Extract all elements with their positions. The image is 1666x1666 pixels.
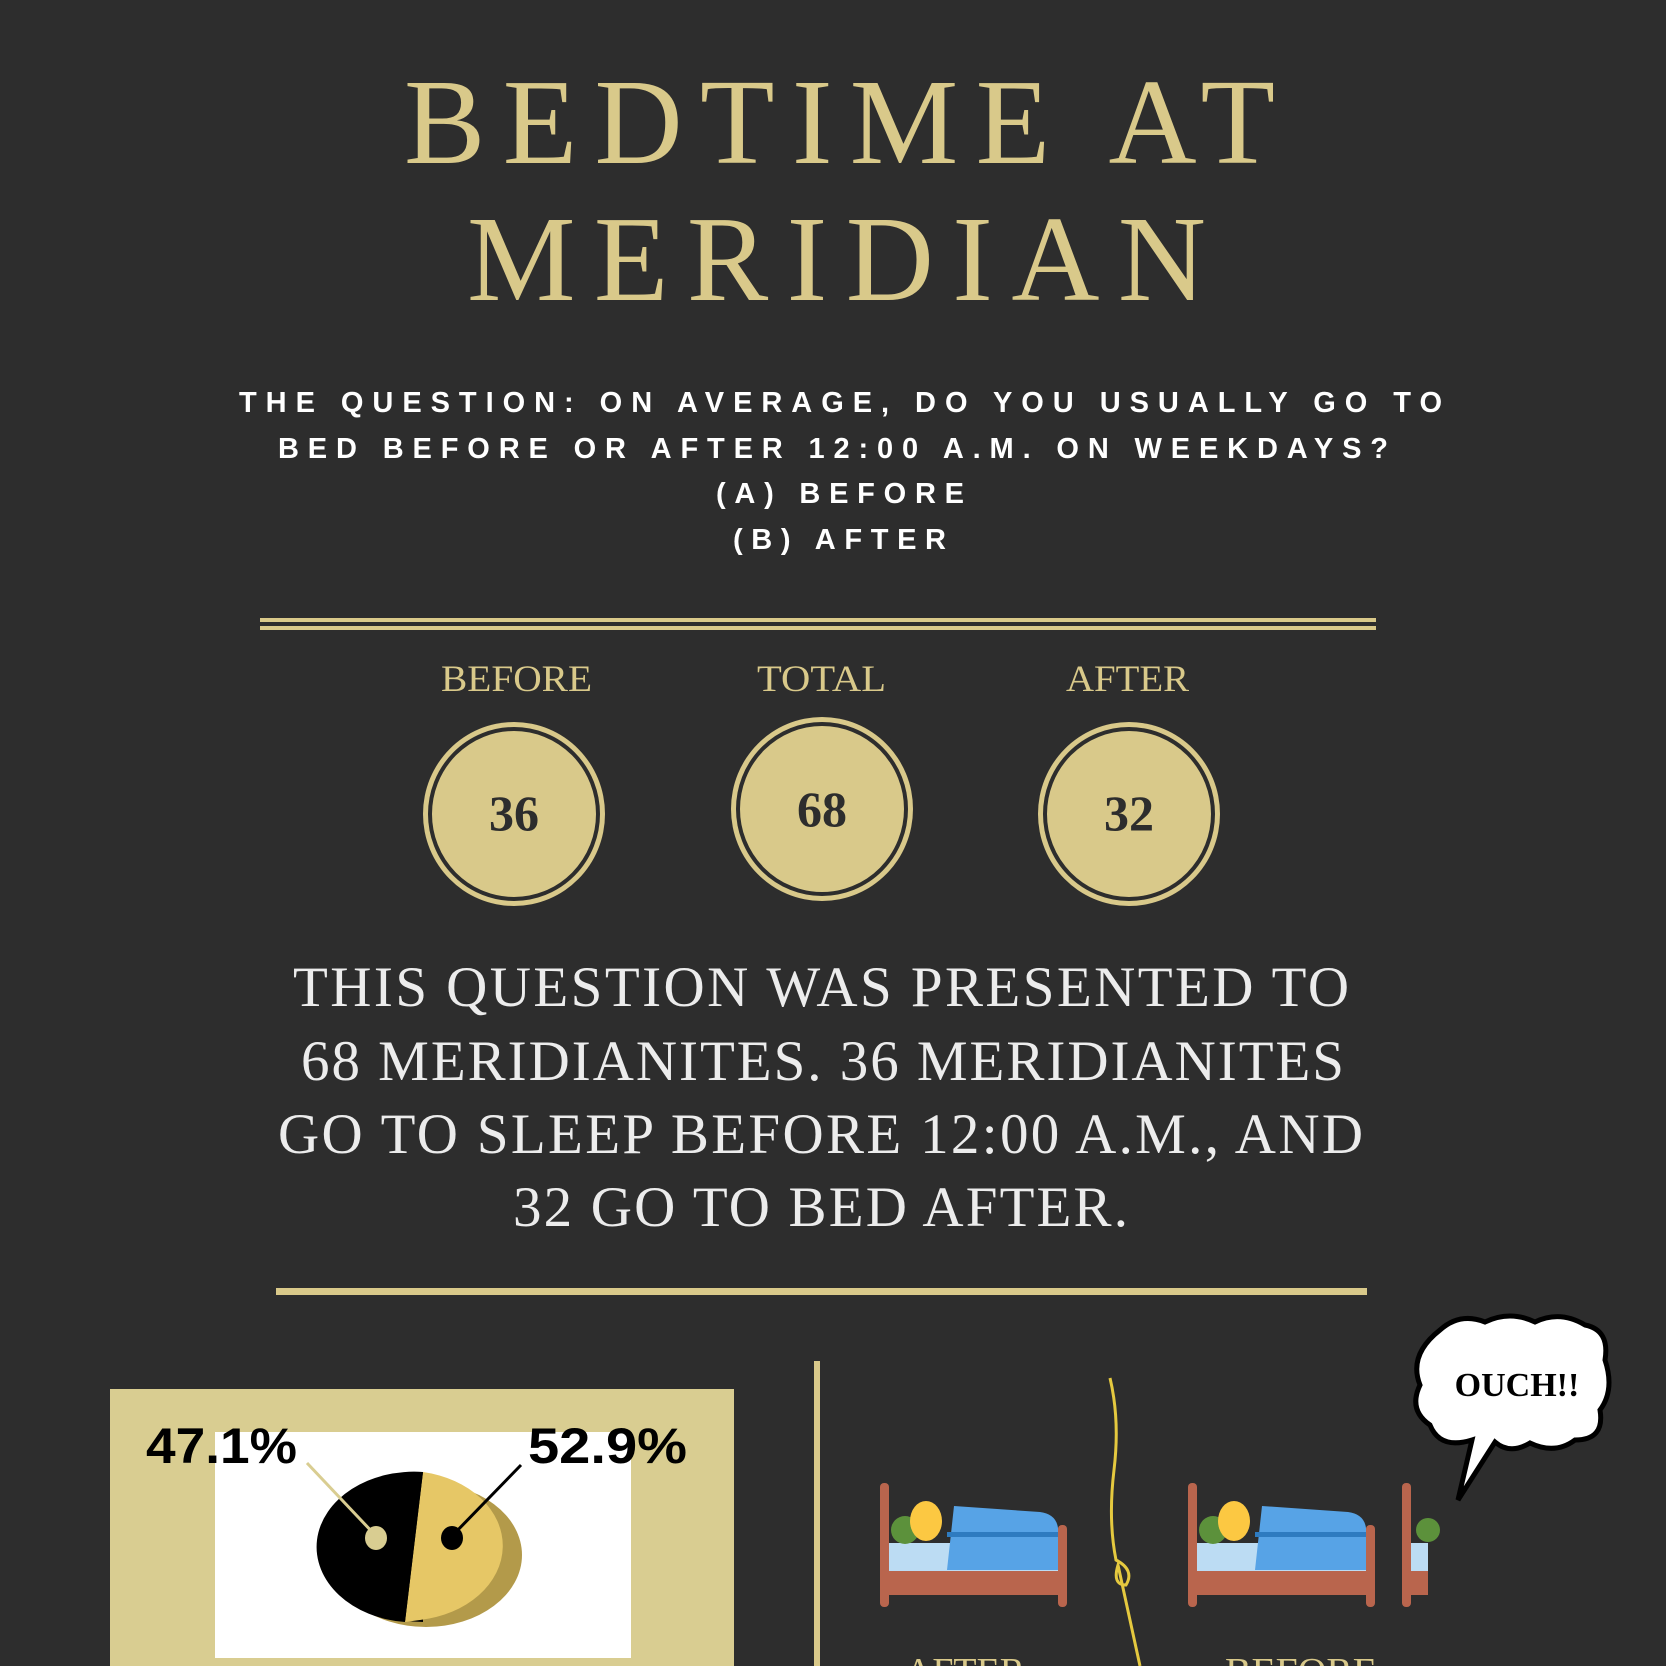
pie — [317, 1472, 522, 1627]
circle: total 68: 68 — [797, 781, 847, 837]
summary paragraph: THIS QUESTION WAS PRESENTED TO — [293, 956, 1349, 1019]
pie labels: 47.1% — [146, 1418, 297, 1474]
circle: after 32 — [1038, 722, 1220, 906]
bed labels — [905, 1651, 1377, 1666]
panel: pie chart — [110, 1389, 734, 1666]
summary paragraph — [278, 956, 1363, 1239]
question text — [239, 387, 1442, 556]
summary paragraph: 32 GO TO BED AFTER. — [513, 1176, 1128, 1239]
question text: (A) BEFORE — [716, 478, 964, 510]
question text: THE QUESTION: ON AVERAGE, DO YOU USUALLY GO TO — [239, 387, 1442, 419]
stat labels — [441, 659, 1189, 700]
panel: pie chart: 52.9% — [528, 1418, 687, 1474]
icon: rope — [1110, 1378, 1140, 1666]
question text: (B) AFTER — [733, 524, 946, 556]
circle: total 68 — [731, 717, 913, 901]
summary paragraph: GO TO SLEEP BEFORE 12:00 A.M., AND — [278, 1103, 1363, 1166]
stat labels: TOTAL — [757, 659, 886, 700]
circle: after 32: 32 — [1104, 785, 1154, 841]
speech bubble — [1416, 1316, 1609, 1500]
icon: partial bed — [1402, 1483, 1440, 1607]
title — [404, 55, 1275, 327]
title: BEDTIME AT — [404, 55, 1275, 190]
speech bubble: OUCH!! — [1455, 1367, 1579, 1404]
question text: BED BEFORE OR AFTER 12:00 A.M. ON WEEKDAYS? — [278, 433, 1388, 465]
title: MERIDIAN — [467, 192, 1206, 327]
circle: before 36: 36 — [489, 785, 539, 841]
summary paragraph: 68 MERIDIANITES. 36 MERIDIANITES — [301, 1030, 1344, 1093]
stat labels: AFTER — [1066, 659, 1189, 700]
stat labels: BEFORE — [441, 659, 592, 700]
circle: before 36 — [423, 722, 605, 906]
icon: bed after — [880, 1483, 1067, 1607]
icon: bed before — [1188, 1483, 1375, 1607]
